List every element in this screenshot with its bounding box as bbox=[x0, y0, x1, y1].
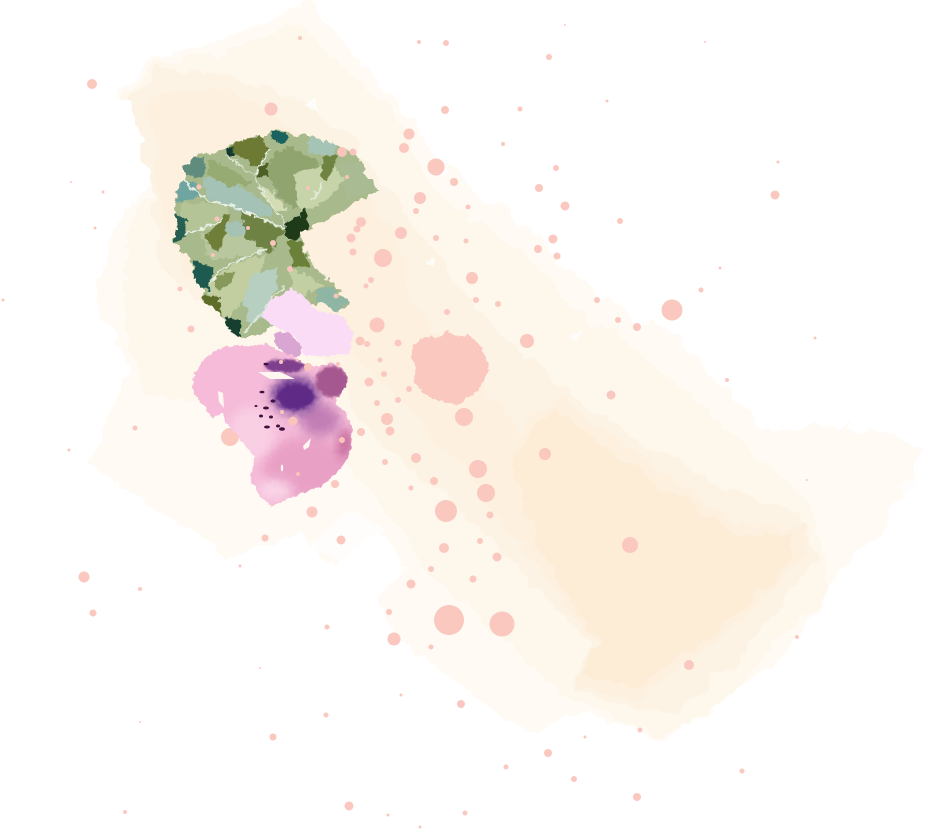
splatter: dots over leaf bbox=[196, 147, 356, 298]
icon: green leaf bbox=[167, 127, 387, 343]
white gaps in wash bbox=[305, 98, 928, 565]
icon: pink flower bbox=[187, 288, 357, 510]
splatter: large blot bbox=[411, 331, 490, 405]
flower highlights bbox=[218, 372, 311, 472]
stamen dots bbox=[254, 363, 285, 431]
splatter: dots over flower bbox=[279, 358, 345, 476]
watercolor wash bbox=[90, 2, 925, 737]
